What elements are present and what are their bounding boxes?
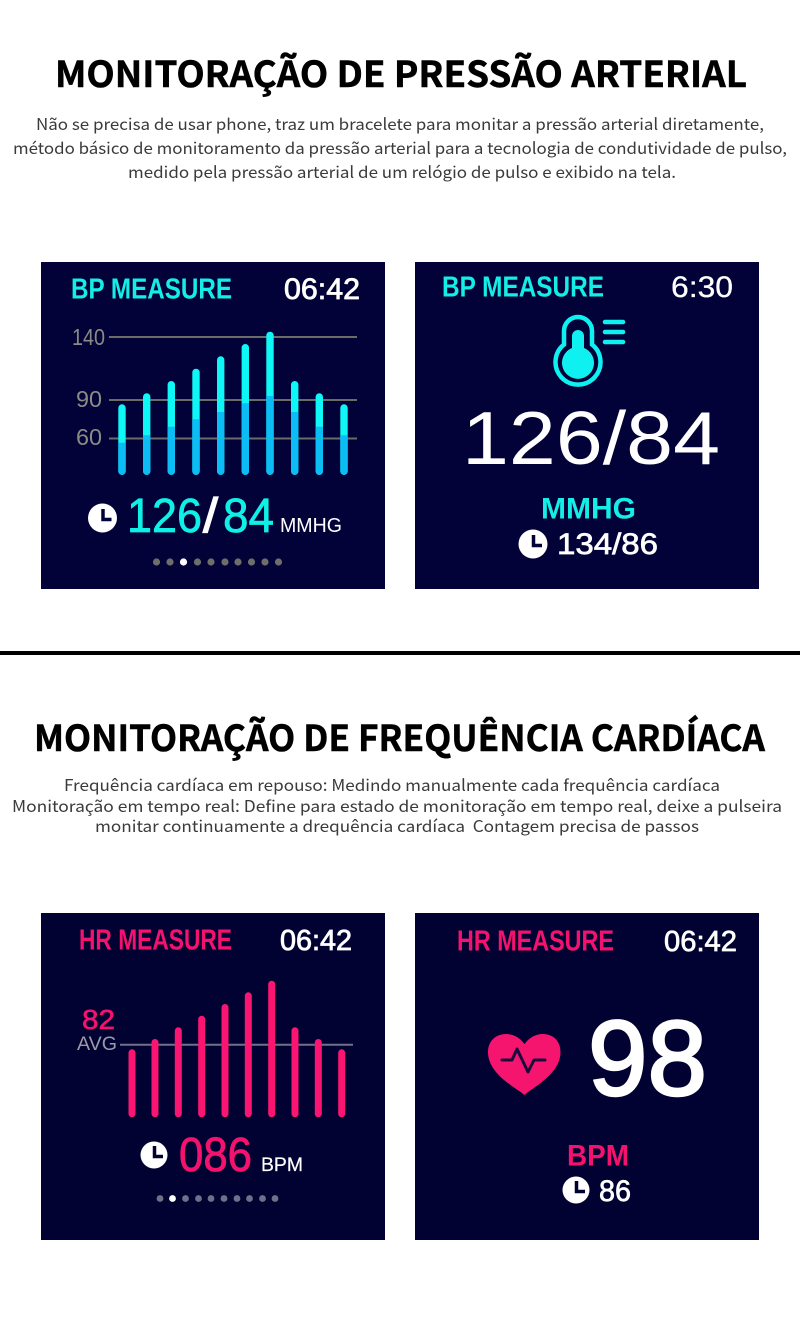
reading: 086 BPM	[179, 1129, 303, 1182]
previous reading: 134/86: 134/86	[557, 528, 658, 561]
divider	[0, 651, 800, 655]
text block: blood pressure description: medido pela pressão arterial de um relógio de pulso e exibido na tela.	[128, 159, 676, 183]
text block: heart rate description: monitar continuamente a drequência cardíaca Contagem precisa de passos	[95, 813, 699, 837]
reading: 126/84 MMHG: 126	[127, 490, 202, 543]
reading: 126/84: 126/84	[462, 396, 720, 480]
text block: blood pressure description: Não se precisa de usar phone, traz um bracelete para monitar a pressão arterial diretamente,	[36, 111, 764, 135]
icon: clock	[88, 504, 117, 532]
heading: BP MEASURE: BP MEASURE	[71, 274, 232, 306]
heading: HR MEASURE: HR MEASURE	[79, 924, 232, 956]
title: heart rate: MONITORAÇÃO DE FREQUÊNCIA CARDÍACA	[34, 710, 766, 762]
clock time: 06:42	[664, 926, 737, 958]
icon: clock	[140, 1142, 168, 1168]
text block: heart rate description: Monitoração em tempo real: Define para estado de monitoração em tempo real, deixe a pulseira	[12, 793, 782, 817]
heading: HR MEASURE: HR MEASURE	[457, 926, 614, 958]
icon: heart with pulse	[488, 1034, 560, 1095]
unit: BPM: BPM	[567, 1140, 629, 1172]
panel: BP reading screen	[415, 262, 759, 589]
bar chart: blood pressure: 90	[76, 386, 102, 412]
text block: blood pressure description	[13, 111, 787, 183]
clock time: 6:30	[671, 271, 733, 304]
bar chart: blood pressure	[72, 324, 357, 475]
reading: 126/84 MMHG	[127, 490, 342, 543]
unit: MMHG: MMHG	[541, 492, 636, 526]
bar chart: heart rate: AVG	[77, 1034, 117, 1055]
icon: clock	[518, 530, 548, 558]
panel: HR reading screen	[415, 913, 759, 1240]
panel: BP bar chart screen	[41, 262, 385, 589]
clock time: 06:42	[280, 925, 352, 957]
reading: 126/84 MMHG: MMHG	[280, 515, 342, 537]
panel: HR bar chart screen	[41, 913, 385, 1240]
icon: clock	[562, 1176, 590, 1204]
reading: 98: 98	[588, 998, 707, 1118]
text block: blood pressure description: método básico de monitoramento da pressão arterial para a tecnologia de condutividade de pulso,	[13, 135, 787, 159]
clock time: 06:42	[284, 273, 360, 306]
text block: heart rate description: Frequência cardíaca em repouso: Medindo manualmente cada frequência cardíaca	[64, 772, 720, 796]
reading: 086 BPM: BPM	[261, 1155, 303, 1176]
title: blood pressure: MONITORAÇÃO DE PRESSÃO ARTERIAL	[55, 46, 747, 98]
bar chart: blood pressure: 140	[72, 324, 105, 350]
text block: heart rate description	[12, 772, 782, 837]
page dots	[153, 558, 282, 566]
bar chart: heart rate	[77, 981, 353, 1117]
bar chart: blood pressure: 60	[76, 424, 102, 450]
reading: 086 BPM: 086	[179, 1129, 252, 1182]
bar chart: heart rate: 82	[82, 1004, 115, 1035]
reading: 126/84 MMHG: /	[203, 490, 219, 543]
heading: BP MEASURE: BP MEASURE	[442, 272, 604, 304]
page dots	[157, 1195, 278, 1202]
previous reading: 86: 86	[599, 1175, 631, 1208]
icon: thermometer	[555, 317, 623, 385]
reading: 126/84 MMHG: 84	[223, 490, 274, 543]
